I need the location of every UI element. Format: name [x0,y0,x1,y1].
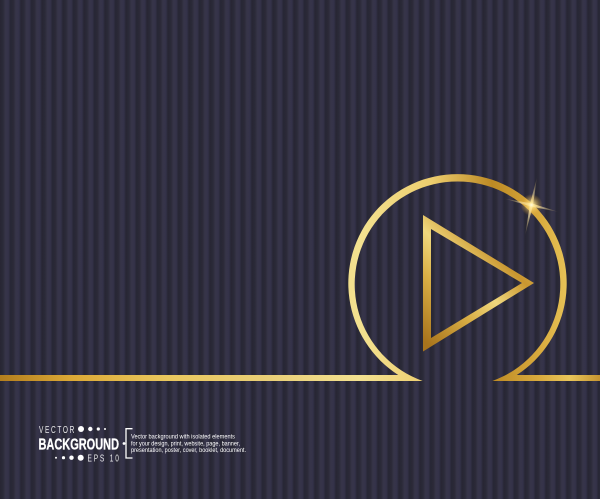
label: eps 10: EPS 10 [88,452,121,464]
dots row bottom [55,455,84,461]
logo block [38,423,121,464]
bracket [123,429,132,458]
label: vector: VECTOR [39,423,76,435]
sparkle [504,177,559,236]
gold line with circle [0,174,600,381]
play triangle icon [423,215,534,352]
description text: Vector background with isolated elements [131,435,235,441]
description text [131,435,246,454]
dots row top [78,426,106,432]
heading: background: BACKGROUND [38,437,119,454]
description text: for your design, print, website, page, banner, [131,441,240,447]
description text: presentation, poster, cover, booklet, document. [131,448,246,454]
